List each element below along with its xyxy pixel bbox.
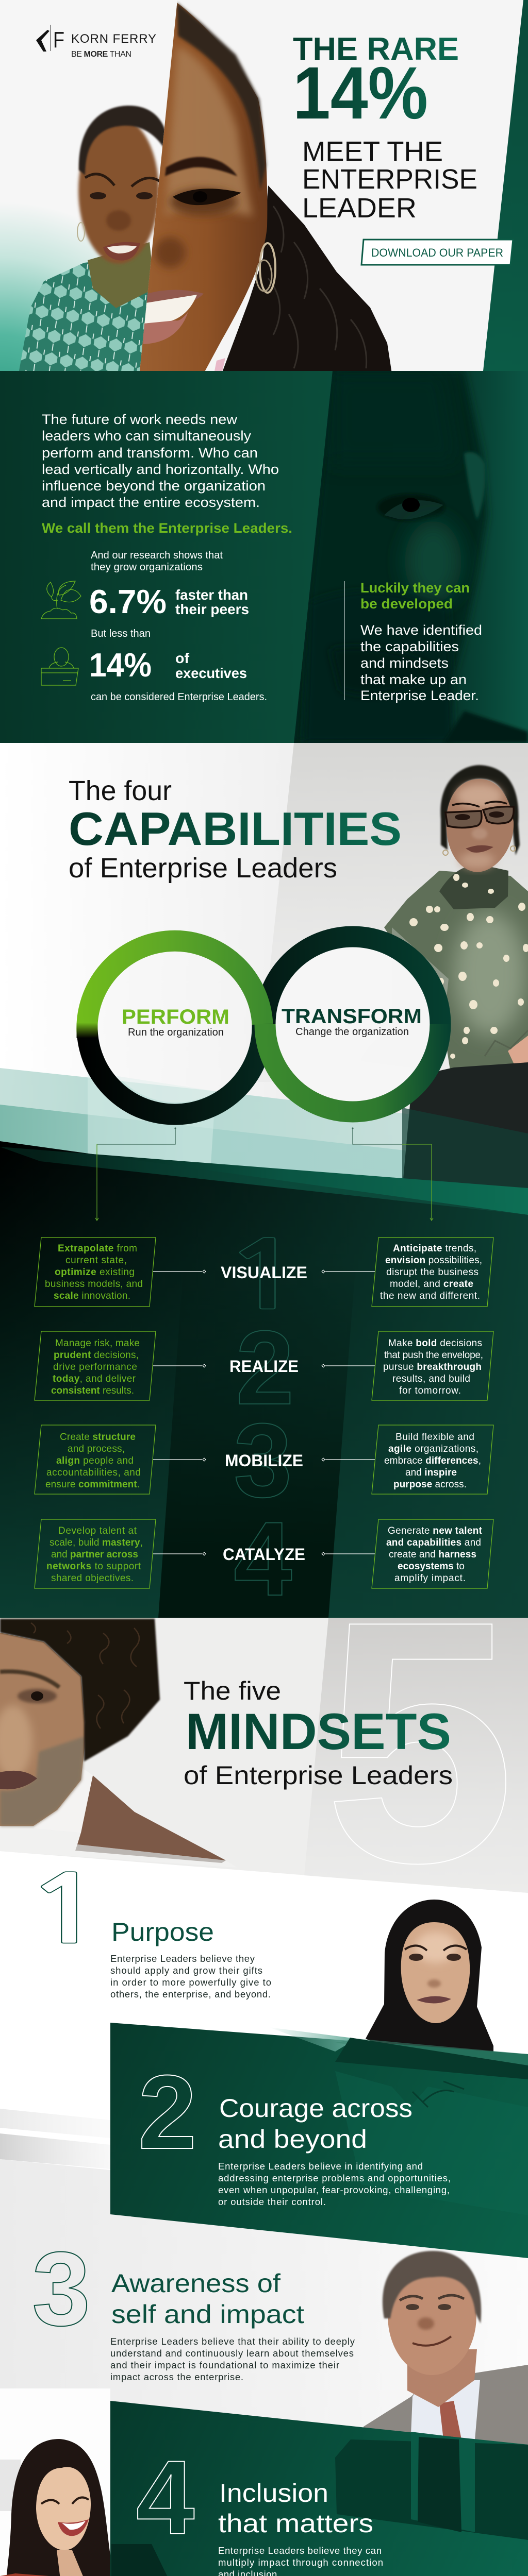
text: intro paragraph: The future of work needs new: [42, 412, 238, 427]
label: perform: [122, 1006, 229, 1038]
logo: KORN FERRY: [71, 32, 156, 46]
text: luckily callout: the capabilities: [360, 639, 459, 654]
row: catalyze: ecosystems to: [398, 1561, 465, 1572]
heading: mindsets: [184, 1676, 453, 1790]
text: luckily callout: and mindsets: [360, 655, 449, 671]
row: realize: results, and build: [392, 1374, 470, 1384]
stat: 6.7%: [89, 583, 249, 620]
background: teal bands: [0, 1068, 528, 1221]
text: purpose body: others, the enterprise, and beyond.: [110, 1989, 271, 1999]
text: intro paragraph: perform and transform. Who can: [42, 445, 258, 461]
heading: mindsets: MINDSETS: [186, 1703, 451, 1760]
row: mobilize: [35, 1425, 493, 1494]
text: awareness body: Enterprise Leaders believe that their ability to deeply: [110, 2336, 355, 2347]
numerals: outlined 1 to 4: 2: [236, 1309, 294, 1427]
title: LEADER: [302, 193, 417, 224]
title: 14%: [293, 52, 428, 134]
text: awareness body: impact across the enterprise.: [110, 2371, 243, 2382]
text: awareness body: and their impact is foundational to maximize their: [110, 2360, 339, 2370]
stat: 6.7%: their peers: [175, 601, 249, 617]
row: realize: today, and deliver: [53, 1374, 136, 1384]
row: mobilize: purpose across.: [393, 1479, 467, 1490]
icon: person at desk: [41, 648, 78, 685]
heading: inclusion: that matters: [218, 2509, 373, 2538]
heading: courage: and beyond: [218, 2125, 367, 2154]
photo: small woman's face: [19, 106, 170, 374]
text: research: And our research shows that: [91, 550, 223, 561]
row: realize: REALIZE: [229, 1357, 299, 1376]
row: mobilize: Build flexible and: [395, 1432, 474, 1443]
text: inclusion body: multiply impact through connection: [218, 2557, 383, 2568]
row: visualize: Extrapolate from: [58, 1243, 137, 1254]
heading: capabilities: CAPABILITIES: [69, 803, 402, 855]
row: realize: pursue breakthrough: [383, 1362, 482, 1372]
text: courage body: Enterprise Leaders believe in identifying and: [218, 2161, 423, 2172]
text: luckily callout: We have identified: [360, 622, 482, 638]
stat: 14%: of: [175, 650, 190, 666]
panel: green inclusion: [110, 2401, 528, 2576]
numeral: 2: 2: [138, 2054, 196, 2171]
row: visualize: the new and different.: [380, 1291, 480, 1301]
logo: BE MORE THAN: [71, 50, 131, 59]
text: intro paragraph: [42, 412, 279, 510]
heading: awareness: Awareness of: [111, 2269, 280, 2298]
photo: woman in hijab: [366, 1900, 493, 2056]
row: catalyze: [35, 1519, 493, 1588]
text: luckily callout: that make up an: [360, 672, 467, 687]
title: [293, 31, 477, 224]
heading: courage: [218, 2094, 412, 2154]
logo: F: [53, 27, 64, 53]
numeral: 3: 3: [32, 2230, 90, 2348]
row: realize: for tomorrow.: [399, 1385, 461, 1396]
text: purpose body: should apply and grow their gifts: [110, 1965, 262, 1976]
ghost: blouse overlay: [335, 2038, 528, 2215]
button: download: DOWNLOAD OUR PAPER: [371, 246, 503, 259]
text: purpose body: in order to more powerfully give to: [110, 1977, 271, 1988]
heading: inclusion: Inclusion: [219, 2479, 328, 2507]
row: mobilize: accountabilities, and: [46, 1467, 141, 1478]
row: realize: that push the envelope,: [384, 1350, 483, 1361]
heading: awareness: self and impact: [111, 2300, 304, 2329]
heading: mindsets: of Enterprise Leaders: [184, 1761, 453, 1790]
diagram: perform and transform infinity rings: [87, 937, 440, 1114]
panel: mindsets header: [0, 1549, 528, 2184]
row: realize: [35, 1331, 493, 1400]
heading: mindsets: The five: [184, 1676, 281, 1705]
row: catalyze: create and harness: [389, 1549, 476, 1560]
row: mobilize: agile organizations,: [388, 1444, 478, 1454]
row: catalyze: and partner across: [51, 1549, 138, 1560]
text: but less than: But less than: [91, 628, 151, 639]
photo: man looking up: [361, 2251, 528, 2452]
text: inclusion body: Enterprise Leaders believe they can: [218, 2545, 382, 2556]
photo: curly-haired man: [0, 1619, 237, 1868]
mindset 3: awareness: [32, 2230, 528, 2452]
row: visualize: scale innovation.: [54, 1291, 130, 1301]
row: visualize: business models, and: [45, 1279, 143, 1290]
row: mobilize: and process,: [68, 1444, 125, 1454]
row: catalyze: CATALYZE: [223, 1545, 305, 1564]
heading: courage: Courage across: [219, 2094, 412, 2123]
label: perform: PERFORM: [122, 1006, 229, 1028]
label: transform: [282, 1005, 422, 1038]
text: awareness body: [110, 2336, 355, 2382]
row: visualize: [35, 1238, 493, 1307]
text: courage body: [218, 2161, 451, 2207]
row: visualize: envision possibilities,: [385, 1255, 482, 1266]
background: teal strip: [269, 2027, 357, 2052]
text: luckily callout: be developed: [360, 596, 453, 612]
row: catalyze: shared objectives.: [51, 1573, 134, 1584]
band: right green: [483, 0, 528, 371]
row: mobilize: align people and: [56, 1455, 134, 1466]
panel: capabilities table: [0, 1127, 528, 1618]
text: intro paragraph: lead vertically and horizontally. Who: [42, 462, 279, 477]
heading: capabilities: The four: [69, 775, 172, 806]
background: mint fade: [0, 0, 177, 371]
stat: 14%: [89, 646, 247, 684]
row: visualize: optimize existing: [55, 1267, 135, 1278]
row: mobilize: Create structure: [60, 1432, 136, 1443]
text: awareness body: understand and continuously learn about themselves: [110, 2348, 354, 2359]
row: catalyze: networks to support: [46, 1561, 141, 1572]
text: research: they grow organizations: [91, 562, 203, 573]
panel: green courage: [110, 2023, 528, 2258]
text: luckily callout: Enterprise Leader.: [360, 688, 479, 703]
text: intro paragraph: leaders who can simultaneously: [42, 428, 252, 444]
row: catalyze: Generate new talent: [388, 1526, 483, 1536]
numerals: outlined 1 to 4: 4: [234, 1500, 292, 1618]
row: realize: drive performance: [53, 1362, 137, 1372]
icon: plant: [41, 581, 81, 619]
text: purpose body: [110, 1953, 271, 1999]
label: transform: Change the organization: [295, 1026, 409, 1038]
row: mobilize: ensure commitment.: [45, 1479, 140, 1490]
stat: 14%: executives: [175, 665, 247, 681]
row: mobilize: and inspire: [405, 1467, 457, 1478]
text: courage body: even when unpopular, fear-provoking, challenging,: [218, 2184, 450, 2195]
text: luckily callout: Luckily they can: [360, 580, 470, 596]
numerals: outlined 1 to 4: 1: [222, 1230, 307, 1323]
connector: transform to right column: [352, 1127, 433, 1221]
logo: [36, 25, 156, 59]
row: catalyze: scale, build mastery,: [50, 1537, 143, 1548]
row: visualize: Anticipate trends,: [393, 1243, 476, 1254]
row: visualize: current state,: [65, 1255, 127, 1266]
row: catalyze: Develop talent at: [58, 1526, 137, 1536]
label: perform: Run the organization: [128, 1027, 224, 1038]
title: ENTERPRISE: [302, 164, 477, 195]
text: purpose body: Enterprise Leaders believe they: [110, 1953, 255, 1964]
row: realize: consistent results.: [51, 1385, 134, 1396]
text: courage body: addressing enterprise problems and opportunities,: [218, 2173, 451, 2183]
mindset 1: purpose: [23, 1864, 493, 2056]
text: considered: can be considered Enterprise Leaders.: [91, 691, 267, 703]
numerals: outlined 1 to 4: [222, 1230, 307, 1618]
heading: capabilities: [69, 775, 402, 884]
text: intro paragraph: and impact the entire ecosystem.: [42, 495, 260, 510]
text: courage body: or outside their control.: [218, 2196, 326, 2207]
row: visualize: disrupt the business: [386, 1267, 478, 1278]
section: mindset background: [0, 2109, 528, 2576]
photo: smiling woman: [0, 2439, 189, 2576]
panel: intro dark green: [0, 371, 528, 743]
row: visualize: model, and create: [390, 1279, 473, 1290]
text: research: [91, 550, 223, 573]
title: THE RARE: [293, 31, 459, 67]
heading: awareness: [111, 2269, 304, 2329]
row: realize: prudent decisions,: [54, 1350, 139, 1361]
button: download: [361, 240, 513, 265]
photo: large woman's face: [134, 3, 392, 374]
text: green statement: We call them the Enterprise Leaders.: [42, 520, 292, 536]
panel: hero: [0, 0, 528, 374]
label: transform: TRANSFORM: [282, 1005, 422, 1028]
heading: purpose: Purpose: [111, 1918, 214, 1946]
stat: 6.7%: faster than: [175, 587, 248, 603]
row: catalyze: amplify impact.: [394, 1573, 466, 1584]
mindset 2: courage: [110, 2023, 528, 2258]
stat: 14%: 14%: [89, 646, 152, 684]
panel: capabilities header: [0, 743, 528, 1236]
text: luckily callout: [360, 580, 482, 703]
heading: capabilities: of Enterprise Leaders: [69, 853, 337, 884]
mindset 4: inclusion: [0, 2401, 528, 2576]
numeral: 1: 1: [23, 1864, 108, 1957]
stat: 6.7%: 6.7%: [89, 583, 167, 620]
text: intro paragraph: influence beyond the organization: [42, 478, 266, 494]
heading: inclusion: [218, 2479, 373, 2538]
row: realize: Make bold decisions: [388, 1338, 482, 1349]
row: mobilize: embrace differences,: [384, 1455, 481, 1466]
numeral: big 5: 5: [324, 1549, 516, 1934]
connector: perform to left column: [95, 1127, 176, 1221]
numeral: 4: 4: [136, 2439, 194, 2556]
row: mobilize: MOBILIZE: [225, 1451, 303, 1470]
row: realize: Manage risk, make: [55, 1338, 140, 1349]
photo: man's face in shadow: [289, 371, 528, 743]
row: visualize: VISUALIZE: [221, 1263, 307, 1282]
numerals: outlined 1 to 4: 3: [234, 1402, 292, 1519]
ghost: jacket overlay: [335, 2432, 528, 2540]
row: catalyze: and capabilities and: [386, 1537, 481, 1548]
photo: woman with glasses: [361, 765, 528, 1206]
text: inclusion body: [218, 2545, 383, 2576]
title: MEET THE: [302, 136, 443, 167]
